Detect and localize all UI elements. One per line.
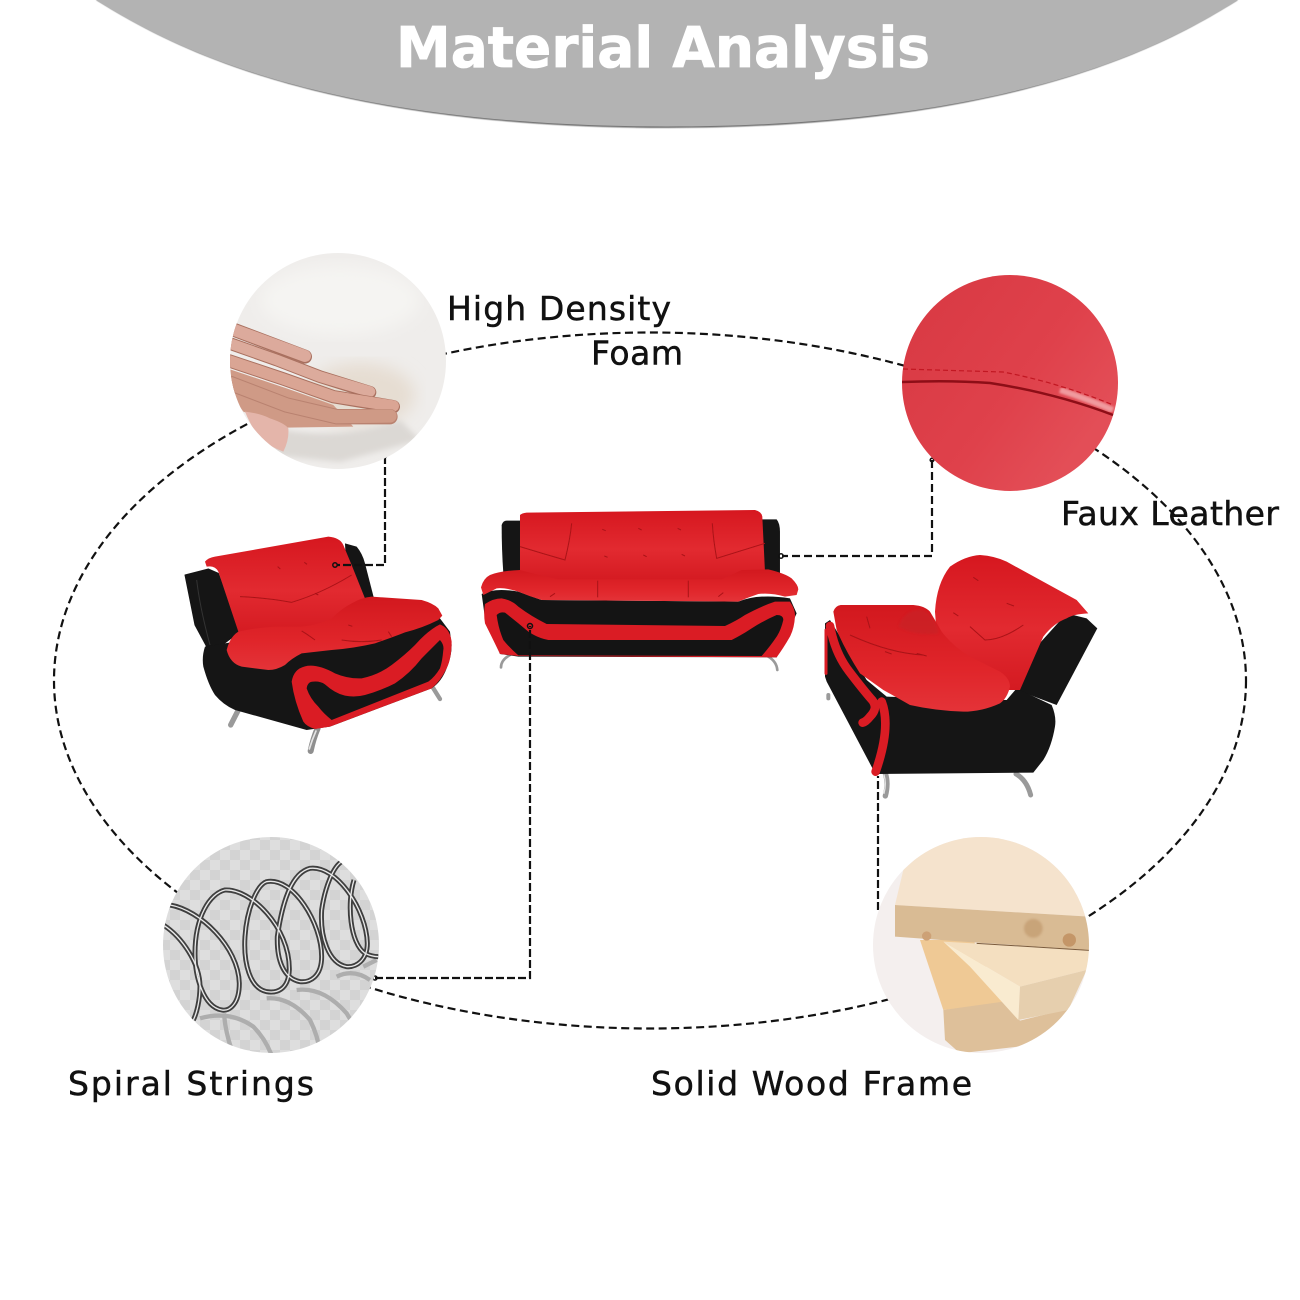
connector end dots — [333, 454, 934, 980]
body — [825, 620, 1055, 774]
connector: foam to armchair — [337, 456, 385, 565]
right loveseat — [825, 555, 1097, 796]
back rear panels — [185, 569, 240, 647]
top board surface — [895, 837, 1085, 916]
seam — [1060, 390, 1113, 410]
red seat cushion — [481, 569, 798, 602]
chrome legs — [231, 688, 440, 751]
label: solid wood frame: Solid Wood Frame — [651, 1064, 972, 1103]
material: high density foam — [227, 251, 448, 471]
material: faux leather — [902, 275, 1118, 491]
hand — [227, 328, 393, 452]
dashed ellipse connecting materials — [54, 332, 1246, 1028]
title banner — [96, 0, 1238, 128]
label: high density foam: Foam — [591, 334, 683, 372]
connector: spring to sofa — [375, 626, 530, 978]
legs — [828, 695, 1031, 796]
palm — [227, 368, 353, 428]
black back — [1017, 613, 1097, 705]
tufting — [520, 523, 765, 597]
body — [203, 618, 452, 730]
connector: leather to sofa — [782, 460, 932, 556]
front black inset — [307, 640, 443, 720]
seat shadow patch — [898, 610, 938, 634]
label: faux leather: Faux Leather — [1061, 494, 1279, 533]
left armchair — [185, 537, 452, 751]
front red panel — [292, 624, 452, 729]
material: solid wood — [870, 830, 1100, 1055]
red seat cushion — [833, 605, 1010, 712]
red back cushion — [935, 555, 1088, 690]
tufting — [240, 562, 392, 642]
spring coil — [163, 862, 378, 1020]
lower board two — [920, 940, 1003, 1010]
red seat cushion — [227, 597, 442, 670]
black back panels — [502, 521, 522, 573]
red side swoosh — [826, 626, 885, 772]
label: high density foam — [447, 289, 683, 372]
top board end face — [895, 905, 1100, 951]
black inset — [497, 612, 783, 656]
thumb — [245, 412, 288, 452]
label: spiral strings: Spiral Strings — [68, 1064, 314, 1103]
center sofa — [481, 510, 798, 670]
tufting — [850, 577, 1023, 656]
lower board one — [943, 942, 1100, 987]
red back cushion — [520, 510, 765, 582]
red frame — [484, 598, 795, 657]
body — [482, 590, 797, 657]
spring shadows — [200, 960, 377, 1060]
material: spiral springs — [160, 835, 385, 1060]
label: high density foam: High Density — [447, 289, 671, 328]
legs — [501, 655, 777, 670]
connector: wood to loveseat — [877, 776, 879, 910]
red back cushion — [205, 537, 365, 635]
title: Material Analysis — [396, 16, 930, 81]
fingers — [230, 328, 305, 357]
